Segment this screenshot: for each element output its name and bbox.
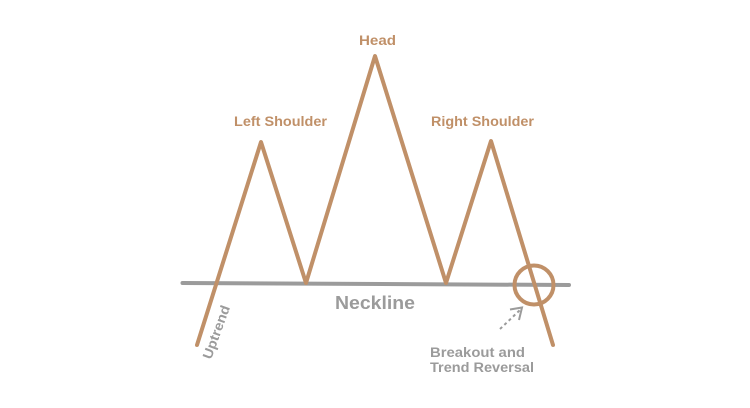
label: right shoulder: Right Shoulder — [431, 114, 535, 129]
label: head: Head — [359, 33, 396, 48]
breakout circle — [514, 266, 554, 304]
arrow: dotted pointer to breakout — [500, 308, 522, 329]
label: breakout and trend reversal — [430, 345, 534, 375]
label: breakout and trend reversal: Breakout and — [430, 345, 525, 360]
label: neckline: Neckline — [335, 293, 415, 313]
label: uptrend: Uptrend — [200, 303, 233, 361]
label: left shoulder: Left Shoulder — [234, 114, 328, 129]
label: breakout and trend reversal: Trend Reversal — [430, 360, 534, 375]
neckline — [182, 283, 569, 285]
price line — [197, 56, 553, 345]
